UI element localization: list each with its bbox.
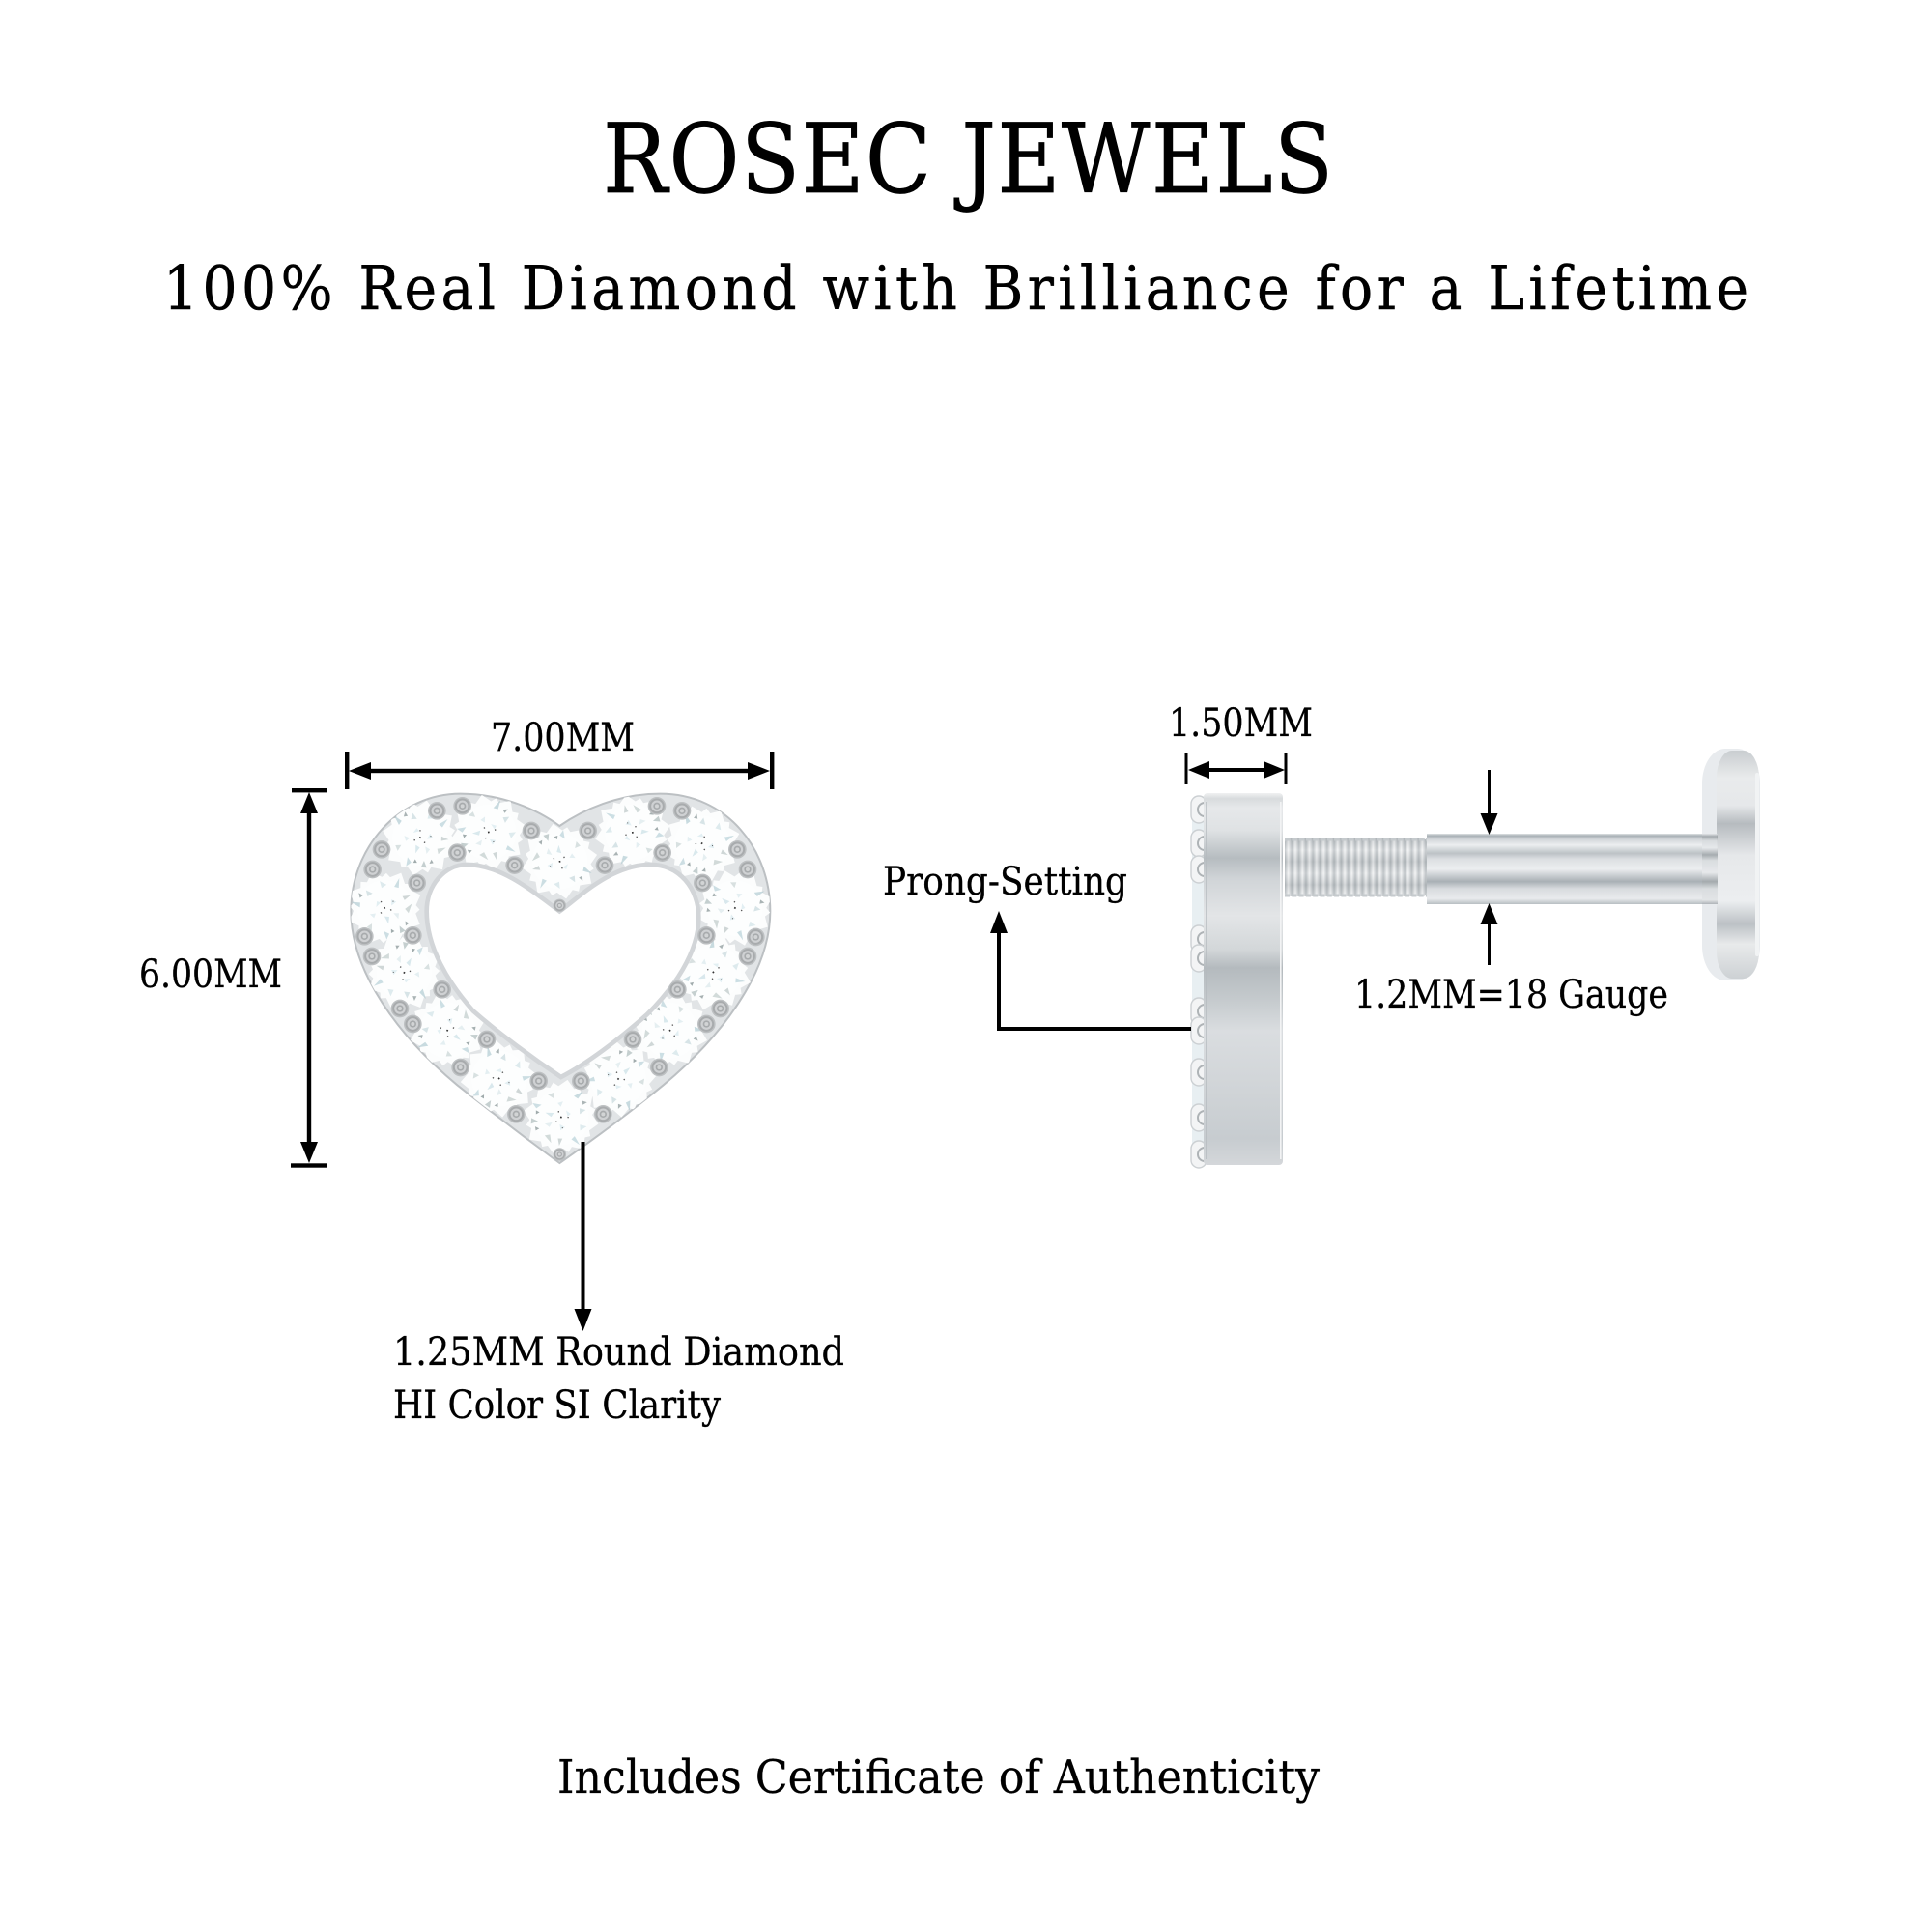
depth dimension arrow xyxy=(1184,753,1287,784)
heart opening xyxy=(427,865,698,1077)
diamond callout arrow xyxy=(574,1142,591,1331)
width dimension arrow xyxy=(345,752,774,789)
label: diamond specification: HI Color SI Clarity xyxy=(393,1383,722,1428)
title: ROSEC JEWELS xyxy=(603,104,1333,215)
heart stud body xyxy=(1204,793,1283,1165)
label: gauge: 1.2MM=18 Gauge xyxy=(1354,973,1668,1017)
threaded post xyxy=(1285,838,1427,896)
label: height: 6.00MM xyxy=(139,952,282,997)
heart metal setting xyxy=(351,794,770,1163)
flat back disc xyxy=(1702,749,1760,980)
panel: side view of stud xyxy=(1191,749,1760,1168)
height dimension arrow xyxy=(291,788,327,1168)
barbell shaft xyxy=(1427,834,1718,904)
pave diamonds xyxy=(327,780,797,1170)
panel: heart front view xyxy=(350,792,771,1165)
footer note: Includes Certificate of Authenticity xyxy=(557,1750,1321,1804)
subtitle: 100% Real Diamond with Brilliance for a Lifetime xyxy=(163,253,1748,324)
label: width: 7.00MM xyxy=(491,716,635,760)
label: depth: 1.50MM xyxy=(1169,701,1313,746)
stone edge and prongs xyxy=(1191,796,1207,1168)
prongs xyxy=(355,797,765,1161)
label: diamond specification xyxy=(393,1330,844,1428)
prong-setting callout arrow xyxy=(990,911,1191,1031)
gauge arrows xyxy=(1480,770,1497,965)
label: diamond specification: 1.25MM Round Diamond xyxy=(393,1330,844,1375)
label: prong setting: Prong-Setting xyxy=(883,860,1127,904)
